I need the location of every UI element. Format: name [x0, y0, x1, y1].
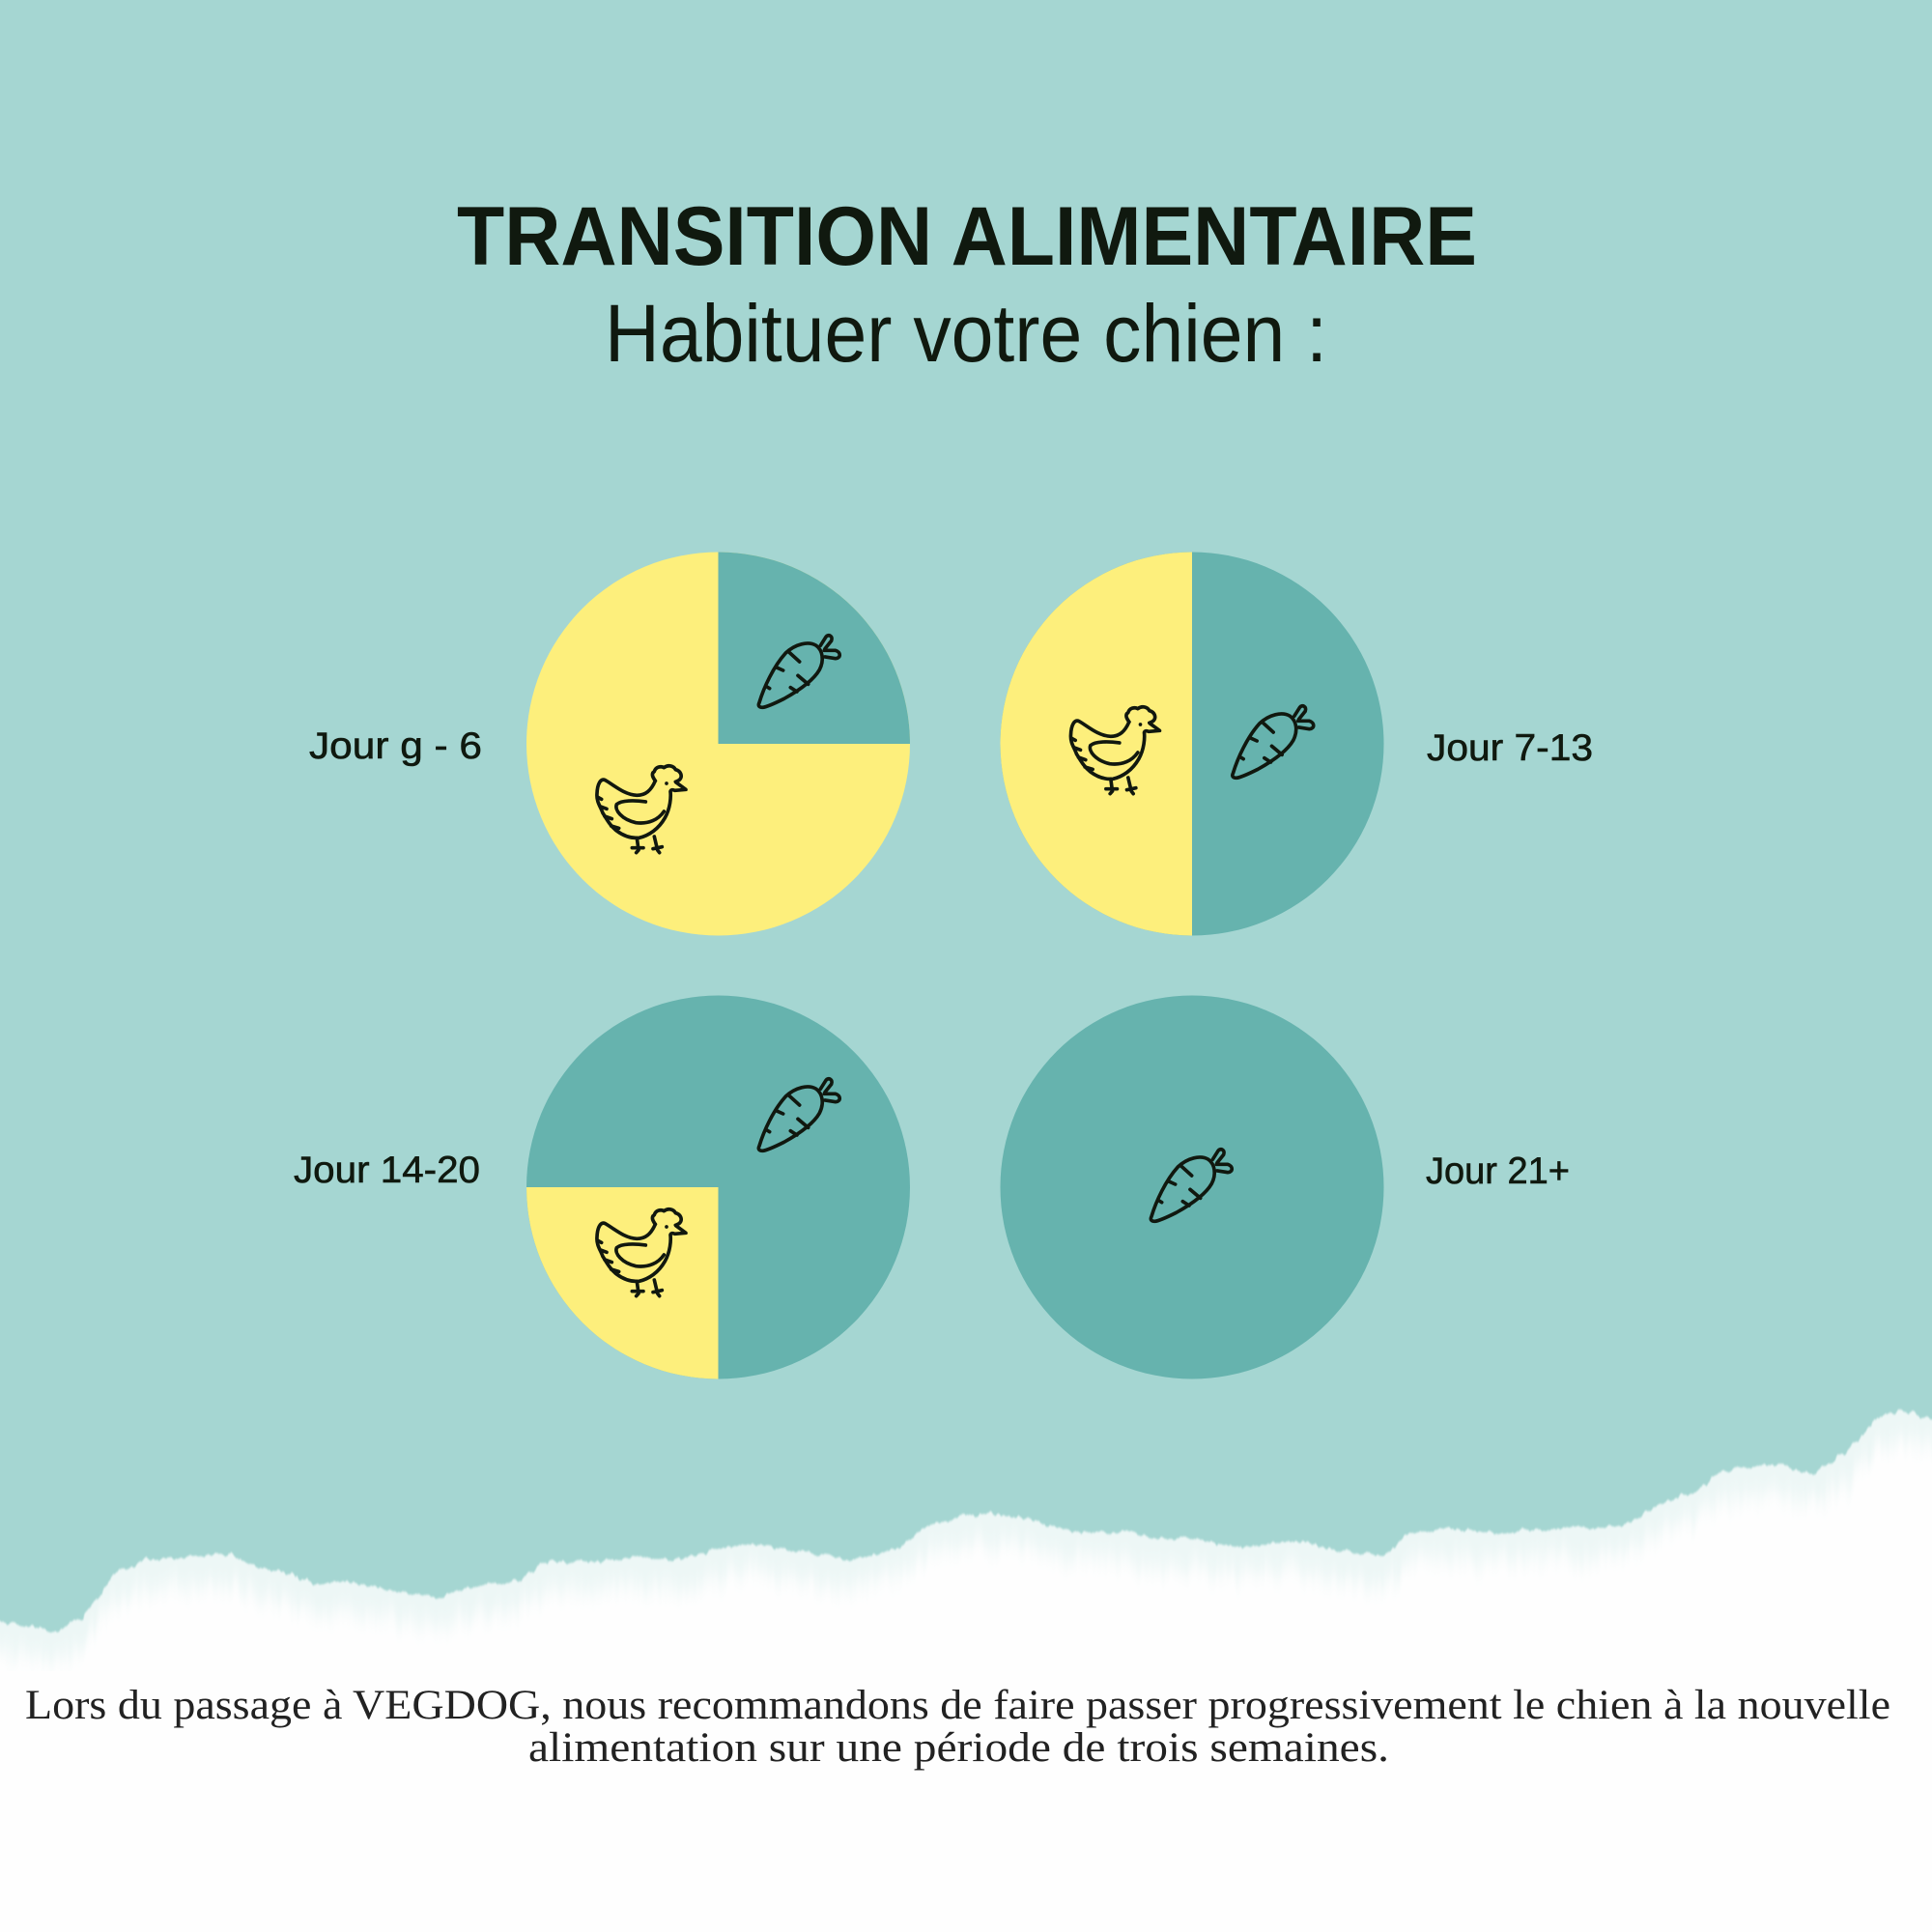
icon: carrot — [758, 1079, 839, 1151]
icon: chicken, first pie — [597, 766, 686, 853]
pie: day 21 onward, fully teal — [1001, 995, 1383, 1379]
pie: day 14 to 20, 25% yellow and 75% teal — [526, 995, 910, 1379]
label: Jour 14-20: Jour 14-20 — [294, 1150, 480, 1191]
body text — [25, 1683, 1890, 1771]
subtitle: Habituer votre chien : — [605, 288, 1327, 379]
title: TRANSITION ALIMENTAIRE — [457, 190, 1477, 283]
icon: carrot — [1151, 1150, 1232, 1221]
icon: carrot — [1233, 706, 1314, 778]
torn white paper at the bottom — [0, 1410, 1932, 1932]
body text: Lors du passage à VEGDOG, nous recommandons de faire passer progressivement le chien à la nouvelle — [25, 1683, 1890, 1728]
body text: alimentation sur une période de trois semaines. — [528, 1725, 1389, 1771]
pie: day 1 to 6, 75% yellow and 25% teal — [526, 553, 910, 935]
icon: chicken, third pie — [597, 1209, 686, 1296]
pie: day 7 to 13, half yellow and half teal — [1000, 553, 1383, 935]
label: Jour 7-13: Jour 7-13 — [1427, 727, 1593, 769]
icon: carrot — [758, 636, 839, 707]
icon: chicken, second pie — [1070, 707, 1159, 794]
label: Jour 21+: Jour 21+ — [1426, 1151, 1570, 1192]
label: Jour g - 6: Jour g - 6 — [309, 725, 482, 767]
